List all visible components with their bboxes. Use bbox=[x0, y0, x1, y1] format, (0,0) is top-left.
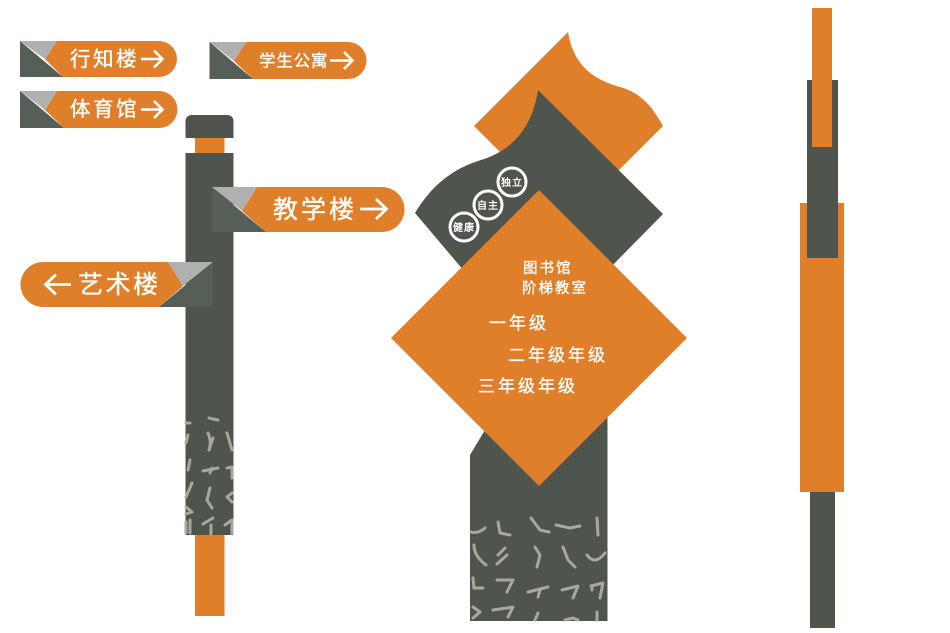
lower dark post bbox=[810, 490, 835, 628]
left signpost bbox=[186, 115, 234, 616]
sign: 学生公寓: 学生公寓 bbox=[259, 52, 328, 70]
circle badge: 自主 bbox=[474, 191, 502, 219]
post cap bbox=[186, 115, 234, 138]
sign: 艺术楼: 艺术楼 bbox=[78, 271, 161, 299]
directory: 一年级: 一年级 bbox=[489, 314, 549, 333]
dark middle diamond bbox=[415, 90, 663, 278]
sign: 体育馆: 体育馆 bbox=[70, 98, 139, 121]
circle badge: 独立 bbox=[498, 168, 526, 196]
orange front diamond bbox=[391, 190, 687, 486]
sign: 行知楼: 行知楼 bbox=[70, 48, 139, 71]
circle badge: 健康: 健康 bbox=[453, 221, 475, 234]
orange back diamond bbox=[474, 32, 663, 172]
wide orange panel bbox=[800, 203, 844, 492]
central monument sign bbox=[391, 32, 687, 621]
right side elevation post bbox=[800, 8, 844, 628]
sign: 体育馆 bbox=[20, 91, 178, 128]
post bottom orange base bbox=[195, 535, 224, 616]
directory: 图书馆: 图书馆 bbox=[523, 260, 572, 277]
sign: 教学楼 bbox=[212, 187, 404, 232]
sign: 行知楼 bbox=[20, 41, 177, 77]
circle badge: 健康 bbox=[450, 213, 478, 241]
directory: 阶梯教室: 阶梯教室 bbox=[522, 280, 588, 297]
orange top panel bbox=[812, 8, 832, 147]
circle badge: 独立: 独立 bbox=[501, 176, 523, 189]
directory: 二年级年级: 二年级年级 bbox=[508, 346, 608, 365]
dark lower post bbox=[470, 400, 608, 621]
directory: 三年级年级: 三年级年级 bbox=[478, 377, 578, 396]
sign: 学生公寓 bbox=[210, 42, 367, 79]
sign: 教学楼: 教学楼 bbox=[273, 196, 357, 224]
circle badge: 自主: 自主 bbox=[477, 199, 499, 212]
sign: 艺术楼 bbox=[20, 262, 213, 307]
post calligraphy stroke pattern bbox=[186, 418, 232, 534]
dark middle panel bbox=[807, 80, 838, 258]
lower post calligraphy pattern bbox=[471, 518, 605, 620]
post orange neck bbox=[195, 138, 224, 153]
post body bbox=[186, 153, 234, 535]
